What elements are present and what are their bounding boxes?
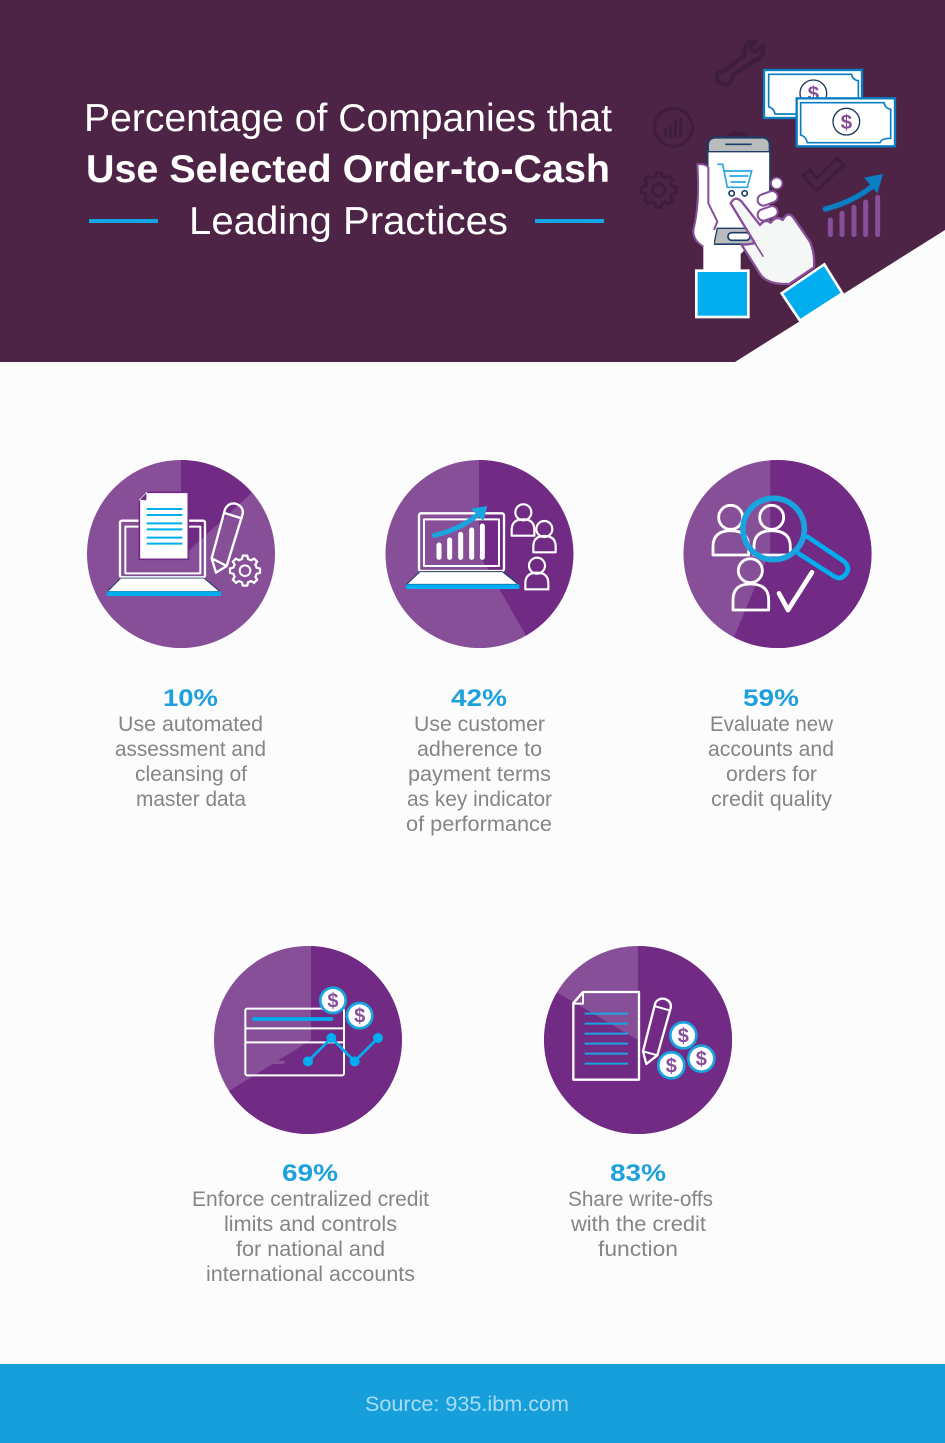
text: 42 percent description: 42% bbox=[451, 685, 507, 712]
text: 59 percent description: credit quality bbox=[711, 788, 833, 811]
panel: 10 percent bbox=[87, 460, 275, 811]
text: 42 percent description bbox=[406, 685, 552, 836]
icon: wrench bbox=[717, 41, 763, 84]
text: 59 percent description: 59% bbox=[743, 685, 799, 712]
icon: dollar bill front: $ bbox=[841, 111, 853, 134]
text: 10 percent description bbox=[115, 685, 266, 811]
text: 59 percent description bbox=[708, 685, 834, 811]
text: 59 percent description: orders for bbox=[726, 763, 817, 786]
text: 59 percent description: Evaluate new bbox=[710, 713, 834, 736]
title: Percentage of Companies that bbox=[84, 97, 612, 140]
text: 10 percent description: assessment and bbox=[115, 738, 266, 761]
icon: rising bar chart bbox=[830, 197, 878, 235]
pie chart: 59% bbox=[684, 460, 872, 648]
text: 83 percent description: function bbox=[598, 1238, 678, 1261]
icon: right sleeve bbox=[782, 264, 842, 321]
icon: document pencil coins: $ bbox=[666, 1055, 677, 1077]
icon: document pencil coins bbox=[573, 992, 714, 1080]
text: 10 percent description: master data bbox=[136, 788, 246, 811]
icon: left sleeve bbox=[696, 271, 748, 317]
icon: rising arrow bbox=[825, 174, 883, 209]
icon: shopping cart bbox=[717, 164, 752, 196]
text: 42 percent description: payment terms bbox=[408, 763, 551, 786]
text: 69 percent description: 69% bbox=[282, 1160, 338, 1187]
text: 10 percent description: 10% bbox=[163, 685, 218, 712]
icon: pointing hand bbox=[731, 199, 814, 284]
icon: circle behind phone bbox=[722, 132, 752, 162]
icon: dollar bill back bbox=[764, 70, 862, 118]
text: 69 percent description bbox=[192, 1160, 429, 1286]
icon: dollar bill front bbox=[797, 98, 895, 146]
text: 42 percent description: adherence to bbox=[417, 738, 542, 761]
text: 42 percent description: of performance bbox=[406, 813, 552, 836]
text: 83 percent description: Share write-offs bbox=[568, 1188, 713, 1211]
panel: 83 percent bbox=[544, 946, 732, 1261]
footer bar bbox=[0, 1364, 945, 1443]
icon: credit card with chart and coins: $ bbox=[354, 1006, 365, 1028]
icon: laptop document pencil gear bbox=[107, 492, 260, 596]
icon: smartphone bbox=[708, 137, 770, 245]
title: Use Selected Order-to-Cash bbox=[86, 148, 610, 191]
text: 42 percent description: as key indicator bbox=[407, 788, 552, 811]
header banner bbox=[0, 0, 945, 362]
text: 69 percent description: Enforce centralized credit bbox=[192, 1188, 429, 1211]
title bbox=[84, 97, 612, 243]
panel: 69 percent bbox=[192, 946, 429, 1286]
icon: laptop chart and people bbox=[406, 504, 556, 589]
icon: bar chart circle bbox=[654, 108, 692, 146]
text: 59 percent description: accounts and bbox=[708, 738, 834, 761]
text: 10 percent description: cleansing of bbox=[135, 763, 247, 786]
icon: document pencil coins: $ bbox=[696, 1049, 707, 1071]
icon: credit card with chart and coins bbox=[245, 988, 383, 1075]
text: 83 percent description bbox=[568, 1160, 713, 1261]
icon: dollar bill back: $ bbox=[808, 83, 820, 106]
icon: people magnifier check bbox=[713, 498, 848, 610]
pie chart: 42% bbox=[386, 460, 574, 648]
pie chart: 83% bbox=[544, 946, 732, 1134]
icon: document pencil coins: $ bbox=[678, 1025, 689, 1047]
source text: Source: 935.ibm.com bbox=[365, 1393, 569, 1416]
panel: 59 percent bbox=[684, 460, 872, 811]
text: 42 percent description: Use customer bbox=[414, 713, 545, 736]
icon: holding hand bbox=[693, 164, 782, 270]
text: 69 percent description: limits and controls bbox=[224, 1213, 397, 1236]
title: Leading Practices bbox=[189, 200, 508, 243]
text: 10 percent description: Use automated bbox=[118, 713, 263, 736]
icon: gear bbox=[641, 173, 676, 207]
text: 83 percent description: 83% bbox=[610, 1160, 666, 1187]
icon: checkmark bbox=[803, 158, 844, 191]
text: 69 percent description: international accounts bbox=[206, 1263, 415, 1286]
text: 83 percent description: with the credit bbox=[570, 1213, 706, 1236]
pie chart: 10% bbox=[87, 460, 275, 648]
icon: credit card with chart and coins: $ bbox=[327, 990, 339, 1012]
text: 69 percent description: for national and bbox=[236, 1238, 385, 1261]
pie chart: 69% bbox=[214, 946, 402, 1134]
header illustration: phone shopping and money bbox=[641, 41, 895, 321]
panel: 42 percent bbox=[386, 460, 574, 836]
